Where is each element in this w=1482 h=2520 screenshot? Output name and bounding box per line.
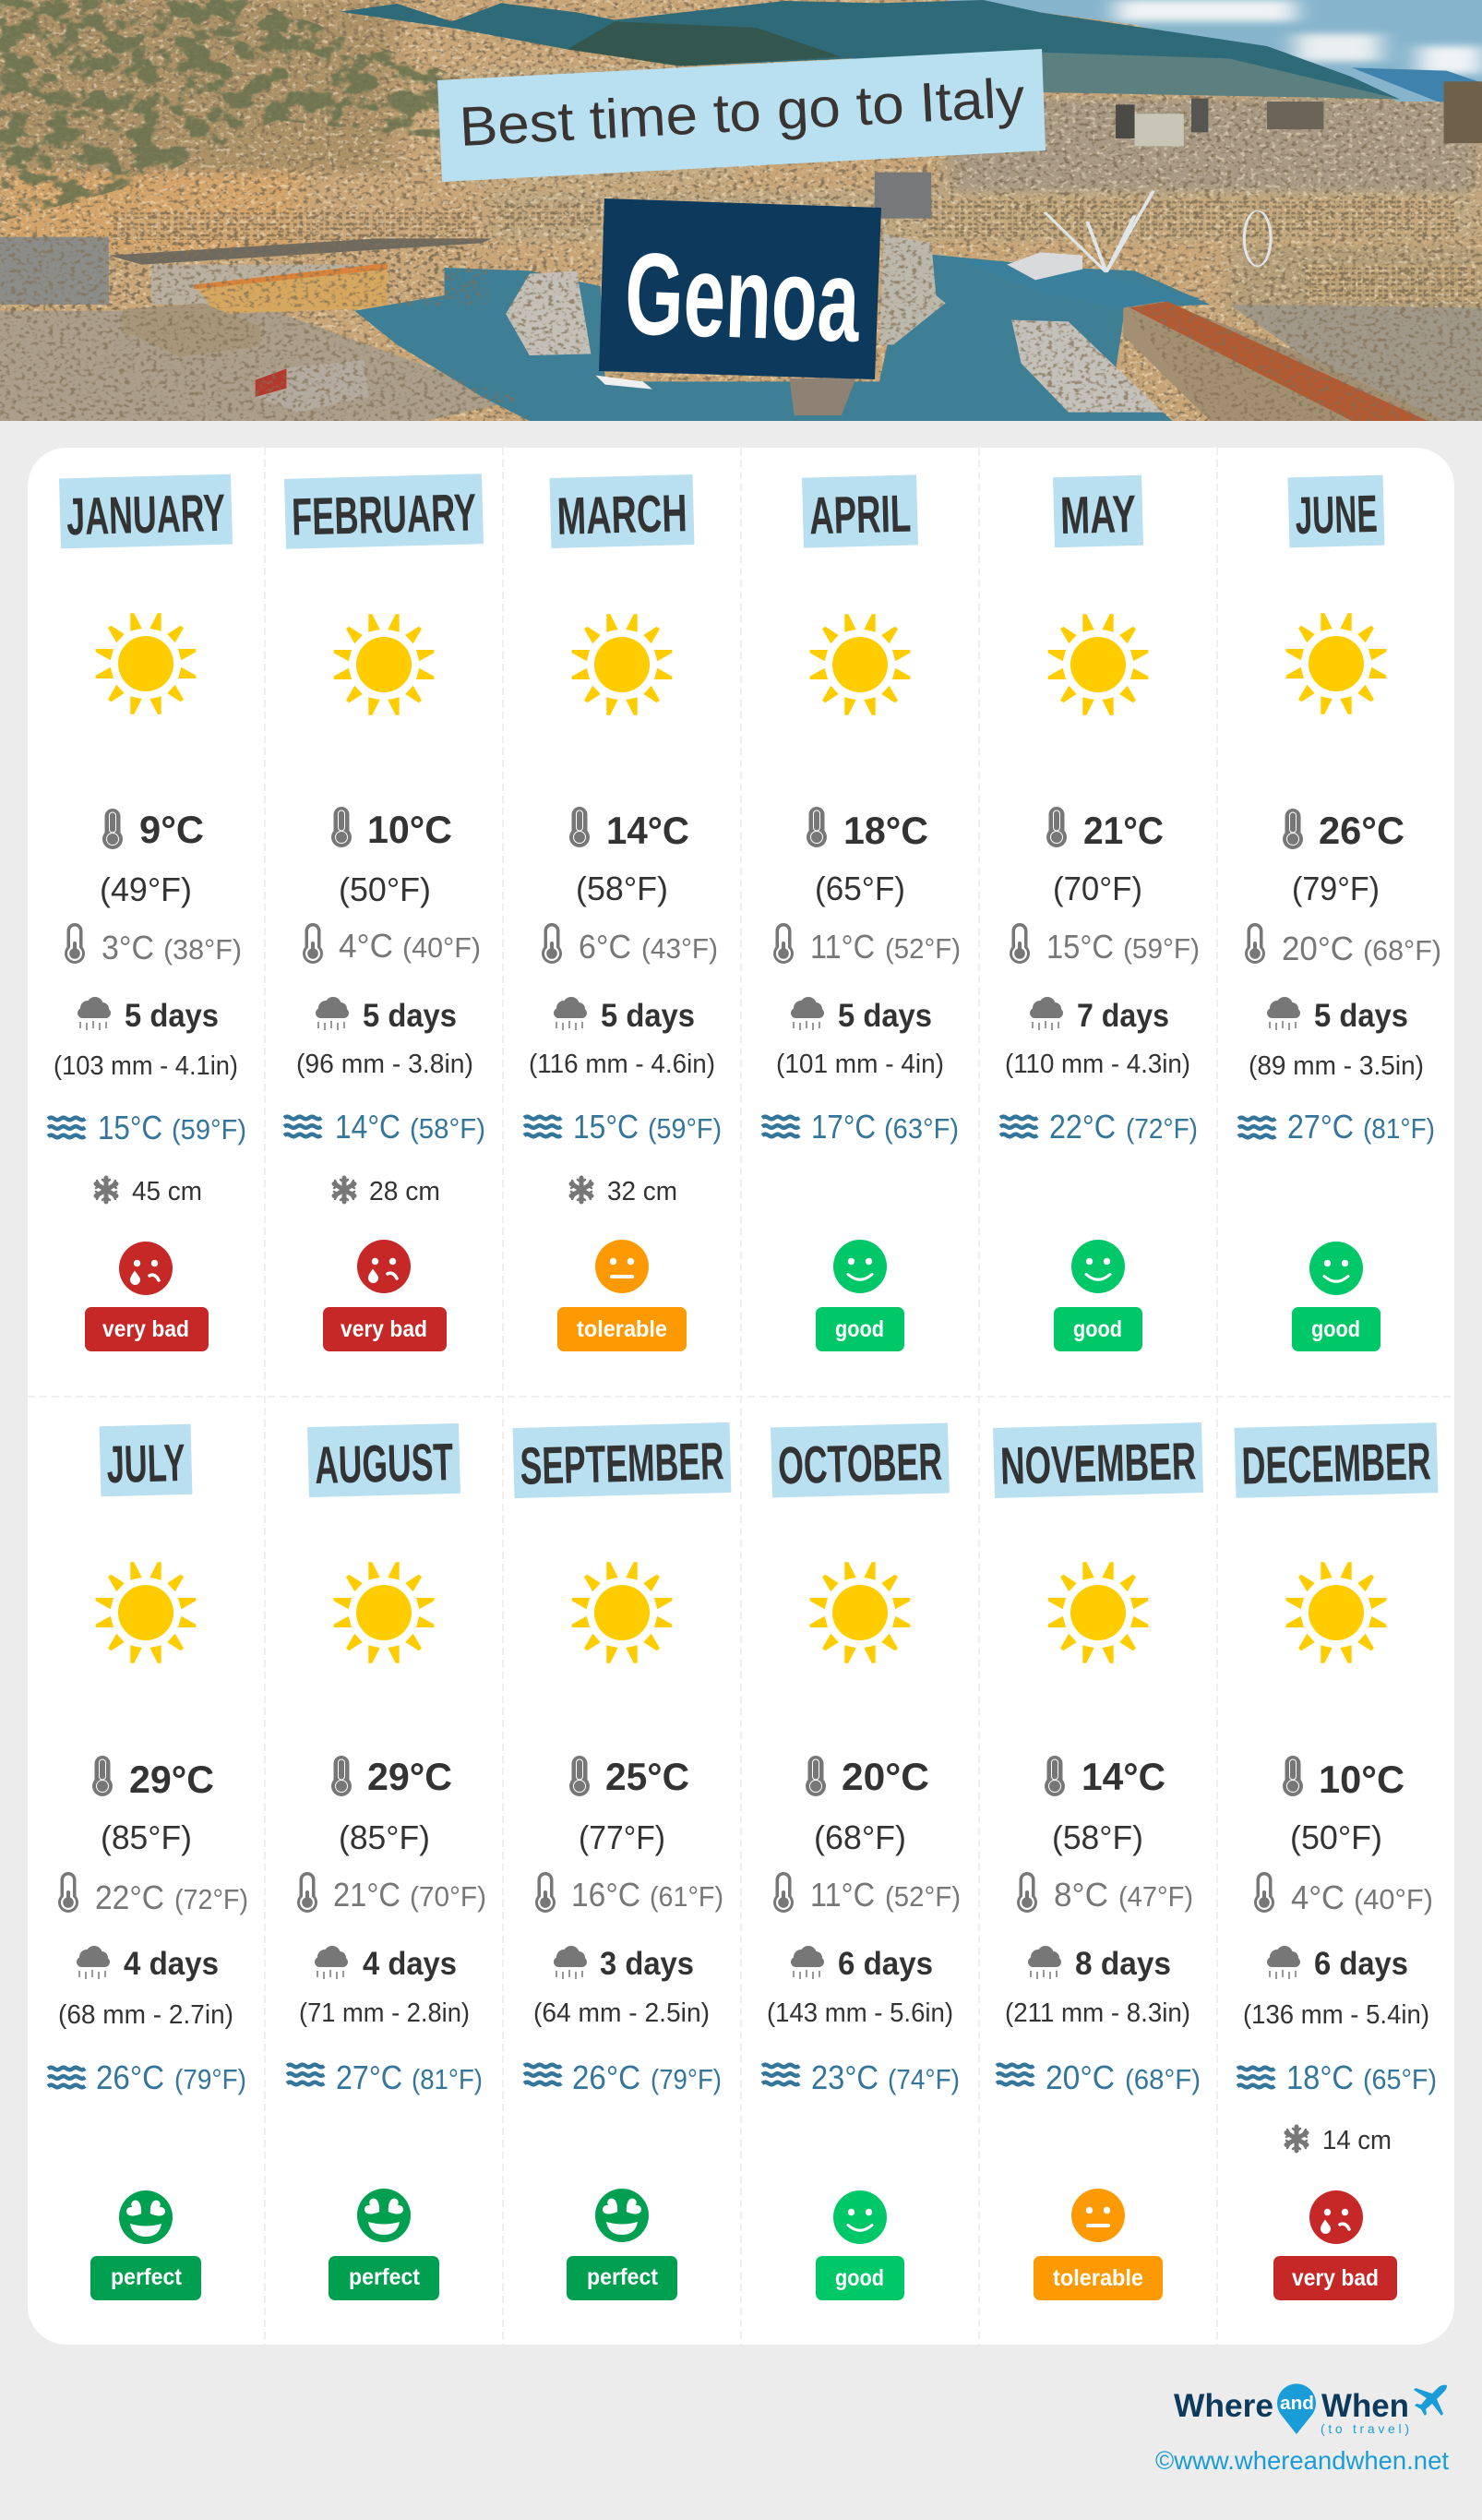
month heading: AUGUST (314, 1433, 454, 1495)
city name banner: Genoa (623, 228, 862, 366)
logo word: When (1321, 2388, 1409, 2424)
rain days: 5 days (363, 998, 457, 1034)
footer logo: Where and When (1174, 2383, 1447, 2436)
month heading (802, 474, 918, 548)
high temperature Fahrenheit: (68°F) (814, 1818, 906, 1856)
panel: April (762, 474, 961, 1351)
month heading: JANUARY (66, 484, 226, 546)
icon: sun (1286, 1562, 1386, 1663)
sea temperature: 27°C (336, 2058, 402, 2096)
rainfall: (116 mm - 4.6in) (529, 1050, 715, 1079)
panel: November (993, 1422, 1203, 2300)
title banner: Best time to go to Italy (458, 66, 1026, 158)
rating: perfect (567, 2189, 677, 2300)
low temperature (58, 1872, 248, 1916)
rain days (77, 1946, 219, 1982)
sea temperature: (68°F) (1125, 2063, 1201, 2095)
month heading (59, 474, 233, 548)
icon: sun (572, 1562, 672, 1663)
low temperature: (38°F) (163, 933, 242, 966)
high temperature: 29°C (367, 1755, 452, 1798)
low temperature: 4°C (1291, 1878, 1345, 1916)
rating: very bad (323, 1240, 447, 1351)
sea temperature: (63°F) (884, 1112, 959, 1145)
high temperature (331, 807, 452, 851)
rain days (1267, 997, 1408, 1034)
sea temperature: (58°F) (410, 1112, 485, 1145)
logo tagline: (to travel) (1321, 2421, 1409, 2436)
low temperature: 20°C (1282, 930, 1354, 967)
low temperature: 16°C (571, 1876, 640, 1914)
red-roof warehouse (1123, 302, 1482, 421)
rating: good: good (835, 1316, 884, 1342)
rainfall: (64 mm - 2.5in) (533, 1998, 710, 2028)
sea temperature: (81°F) (412, 2063, 483, 2095)
icon: sun (1048, 614, 1148, 715)
low temperature: (68°F) (1363, 934, 1441, 966)
panel: monthly weather card (28, 448, 1454, 2345)
month heading: MAY (1059, 485, 1137, 546)
sea temperature (1238, 1108, 1435, 1146)
high temperature: 18°C (843, 809, 928, 852)
sea temperature (524, 2058, 722, 2096)
low temperature (1254, 1872, 1433, 1916)
pin word: and (1280, 2394, 1314, 2414)
high temperature: 14°C (1082, 1755, 1165, 1798)
rating: perfect: perfect (111, 2264, 183, 2290)
icon: sun (810, 1562, 910, 1663)
rating: tolerable: tolerable (577, 1316, 667, 1342)
Bigo and ferris wheel (1045, 191, 1271, 272)
high temperature Fahrenheit: (65°F) (815, 870, 905, 907)
sea temperature: (74°F) (888, 2063, 960, 2095)
low temperature: 15°C (1046, 928, 1114, 966)
sea temperature (762, 1108, 959, 1146)
high temperature Fahrenheit: (58°F) (1052, 1818, 1143, 1856)
low temperature (773, 1872, 961, 1914)
snow depth (571, 1177, 677, 1206)
month heading: JUNE (1295, 485, 1378, 546)
high temperature Fahrenheit: (70°F) (1053, 870, 1142, 907)
sea temperature (284, 1108, 485, 1146)
month heading (1288, 475, 1384, 547)
rating: very bad: very bad (102, 1316, 189, 1342)
tall buildings (1444, 81, 1482, 143)
icon: sun (334, 614, 434, 715)
icon: sun (334, 1562, 434, 1663)
sky (321, 0, 1482, 102)
rain days: 5 days (838, 998, 932, 1034)
high temperature: 26°C (1319, 809, 1404, 852)
icon: sun (96, 613, 196, 714)
month heading: NOVEMBER (999, 1432, 1197, 1496)
rating: perfect: perfect (349, 2264, 421, 2290)
rain days (554, 997, 695, 1034)
high temperature (569, 807, 689, 852)
high temperature (1046, 807, 1164, 852)
panel: October (762, 1423, 961, 2300)
sea temperature (524, 1108, 722, 1146)
sea temperature: 23°C (811, 2058, 878, 2096)
panel: August (287, 1423, 486, 2300)
sea temperature: 26°C (96, 2058, 164, 2096)
rating: good (816, 2190, 904, 2300)
month heading: FEBRUARY (291, 483, 477, 547)
sea temperature: (65°F) (1363, 2063, 1437, 2095)
rain days (791, 997, 932, 1034)
month heading (1053, 475, 1143, 547)
rating: perfect (329, 2189, 439, 2300)
city name banner (599, 198, 881, 379)
high temperature (807, 807, 928, 852)
sea temperature (1000, 1108, 1198, 1146)
rain days (78, 997, 219, 1034)
rain days: 7 days (1077, 998, 1169, 1034)
low temperature (535, 1872, 723, 1914)
high temperature (1283, 1756, 1404, 1801)
high temperature: 10°C (367, 808, 452, 851)
sea temperature: (81°F) (1363, 1112, 1435, 1145)
panel: February (284, 474, 485, 1351)
high temperature Fahrenheit: (58°F) (576, 870, 668, 907)
sea temperature: (72°F) (1126, 1112, 1198, 1145)
rating: good (816, 1240, 904, 1351)
rating: very bad: very bad (341, 1316, 427, 1342)
sea temperature: (79°F) (651, 2063, 722, 2095)
low temperature: (72°F) (174, 1883, 248, 1915)
high temperature: 14°C (606, 809, 689, 852)
high temperature: 25°C (605, 1755, 689, 1798)
rainfall: (71 mm - 2.8in) (299, 1998, 470, 2028)
sea temperature: 15°C (573, 1108, 639, 1146)
icon: map pin (1277, 2383, 1316, 2434)
rainfall: (136 mm - 5.4in) (1243, 2000, 1429, 2030)
high temperature Fahrenheit: (85°F) (339, 1818, 430, 1856)
sea temperature: 20°C (1046, 2058, 1115, 2096)
low temperature: 22°C (95, 1878, 164, 1916)
low temperature (542, 923, 718, 966)
low temperature: 11°C (810, 928, 875, 966)
rating: tolerable (557, 1240, 687, 1351)
low temperature: (52°F) (885, 932, 961, 965)
month heading (513, 1422, 731, 1498)
panel: May (1000, 475, 1200, 1351)
low temperature (297, 1872, 486, 1914)
snow depth: 28 cm (369, 1177, 440, 1206)
panel: December (1235, 1422, 1438, 2300)
high temperature Fahrenheit: (85°F) (101, 1818, 192, 1856)
low temperature: (59°F) (1123, 932, 1200, 965)
water (354, 252, 1210, 421)
high temperature: 20°C (842, 1755, 929, 1798)
panel: September (513, 1422, 731, 2300)
high temperature (92, 1756, 214, 1801)
high temperature Fahrenheit: (79°F) (1292, 870, 1380, 907)
rating: tolerable: tolerable (1053, 2265, 1143, 2291)
title banner (437, 49, 1046, 182)
high temperature (1045, 1755, 1165, 1798)
sea temperature (762, 2058, 960, 2096)
mountains (341, 0, 1399, 99)
low temperature: 3°C (102, 929, 154, 966)
low temperature: (47°F) (1118, 1880, 1193, 1913)
rain days: 6 days (838, 1946, 933, 1982)
footer logo: Where and When: Where (1174, 2388, 1273, 2424)
rain days: 5 days (601, 998, 695, 1034)
sea temperature: (59°F) (648, 1112, 722, 1145)
high temperature: 9°C (139, 808, 204, 851)
icon: sun (1286, 613, 1386, 714)
low temperature: (43°F) (641, 932, 718, 965)
snow depth: 32 cm (607, 1177, 677, 1206)
rainfall: (101 mm - 4in) (776, 1050, 944, 1079)
boats (506, 270, 591, 355)
high temperature Fahrenheit: (49°F) (100, 870, 192, 908)
rating: very bad (1273, 2190, 1397, 2300)
low temperature (1010, 923, 1200, 966)
high temperature Fahrenheit: (50°F) (1290, 1818, 1382, 1856)
sea temperature: 27°C (1287, 1108, 1354, 1146)
rating: good: good (835, 2265, 884, 2291)
panel: March (524, 474, 722, 1351)
month heading: JULY (106, 1434, 185, 1494)
sea temperature: 22°C (1049, 1108, 1116, 1146)
month heading (993, 1422, 1203, 1498)
month heading (100, 1424, 192, 1496)
low temperature (1245, 923, 1441, 967)
rating: good (1054, 1240, 1142, 1351)
rating: perfect: perfect (587, 2264, 659, 2290)
snow depth: 45 cm (132, 1177, 202, 1206)
sea temperature: 15°C (98, 1109, 162, 1146)
high temperature (331, 1755, 452, 1798)
sea temperature (48, 1109, 246, 1146)
sea temperature: 17°C (811, 1108, 876, 1146)
rainfall: (110 mm - 4.3in) (1005, 1050, 1190, 1079)
sea temperature (1237, 2058, 1437, 2096)
rain days: 3 days (600, 1946, 694, 1982)
icon: sun (1048, 1562, 1148, 1663)
high temperature (102, 808, 204, 851)
orange building (194, 263, 388, 314)
white building with red roof (256, 360, 369, 413)
rain days (315, 1946, 457, 1982)
month heading (771, 1423, 950, 1497)
left grey buildings (0, 237, 109, 305)
rain days (1267, 1946, 1408, 1982)
rating: good: good (1311, 1316, 1360, 1342)
rain days: 5 days (125, 998, 219, 1034)
low temperature: (52°F) (885, 1880, 961, 1913)
low temperature: 6°C (579, 928, 631, 966)
low temperature: (40°F) (402, 931, 481, 964)
rainfall: (143 mm - 5.6in) (767, 1998, 953, 2028)
footer website credit: ©www.whereandwhen.net (1155, 2446, 1449, 2475)
month heading: MARCH (556, 484, 687, 546)
high temperature: 21°C (1083, 809, 1164, 852)
low temperature (303, 923, 481, 965)
rain days: 4 days (363, 1946, 457, 1982)
rain days: 6 days (1314, 1946, 1408, 1982)
low temperature: 4°C (339, 927, 393, 965)
header photo: aerial view of Genoa harbour (0, 0, 1482, 421)
rating: very bad: very bad (1292, 2265, 1379, 2291)
low temperature: 21°C (333, 1876, 400, 1914)
panel: June (1238, 475, 1441, 1351)
sea temperature (287, 2058, 483, 2096)
rating: tolerable (1034, 2189, 1163, 2300)
high temperature Fahrenheit: (50°F) (339, 870, 431, 908)
rainfall: (211 mm - 8.3in) (1005, 1998, 1190, 2028)
month heading (284, 474, 484, 549)
snow depth (1286, 2126, 1392, 2155)
rain days (316, 997, 457, 1034)
waterfront facades (114, 197, 1475, 302)
rating: perfect (90, 2190, 201, 2300)
month heading (307, 1423, 460, 1497)
rain days (1030, 997, 1169, 1034)
icon: sun (810, 614, 910, 715)
rating: very bad (85, 1242, 209, 1351)
icon: sun (96, 1562, 196, 1663)
high temperature (569, 1755, 689, 1798)
sea temperature (48, 2058, 246, 2096)
ground on left docks (0, 311, 520, 421)
low temperature: 11°C (810, 1876, 875, 1914)
rainfall: (89 mm - 3.5in) (1249, 1051, 1424, 1081)
rating: good: good (1073, 1316, 1122, 1342)
month heading: OCTOBER (777, 1433, 943, 1495)
rain days (791, 1946, 933, 1982)
rain days: 5 days (1314, 998, 1408, 1034)
rainfall: (96 mm - 3.8in) (296, 1050, 473, 1079)
low temperature (1017, 1872, 1193, 1914)
sea temperature: (59°F) (172, 1113, 246, 1146)
sea temperature: 26°C (572, 2058, 640, 2096)
rainfall: (68 mm - 2.7in) (58, 2000, 233, 2030)
month heading: APRIL (808, 485, 912, 546)
rain days: 8 days (1075, 1946, 1171, 1982)
dock and boat texture (0, 234, 1482, 421)
low temperature: (61°F) (650, 1880, 723, 1913)
high temperature Fahrenheit: (77°F) (579, 1818, 665, 1856)
low temperature (65, 923, 242, 966)
low temperature (773, 923, 961, 966)
panel: January (48, 474, 246, 1351)
sea temperature: 14°C (335, 1108, 400, 1146)
snow depth (334, 1177, 440, 1206)
sea temperature: (79°F) (174, 2063, 246, 2095)
rainfall: (103 mm - 4.1in) (54, 1051, 238, 1081)
high temperature: 29°C (129, 1758, 214, 1801)
icon: sun (572, 614, 672, 715)
low temperature: 8°C (1054, 1876, 1108, 1914)
sea temperature: 18°C (1286, 2058, 1354, 2096)
rain days: 4 days (124, 1946, 219, 1982)
high temperature: 10°C (1319, 1758, 1404, 1801)
rating: good (1292, 1242, 1380, 1351)
snow depth (96, 1177, 202, 1206)
warehouse (123, 303, 260, 357)
icon: airplane (1414, 2385, 1447, 2416)
rain days (554, 1946, 694, 1982)
snow depth: 14 cm (1322, 2126, 1392, 2155)
low temperature: (40°F) (1354, 1883, 1433, 1915)
sea temperature (997, 2058, 1201, 2096)
month heading (550, 474, 694, 548)
panel: July (48, 1424, 248, 2300)
rain days (1028, 1946, 1171, 1982)
low temperature: (70°F) (410, 1880, 486, 1913)
month heading: SEPTEMBER (520, 1432, 724, 1496)
